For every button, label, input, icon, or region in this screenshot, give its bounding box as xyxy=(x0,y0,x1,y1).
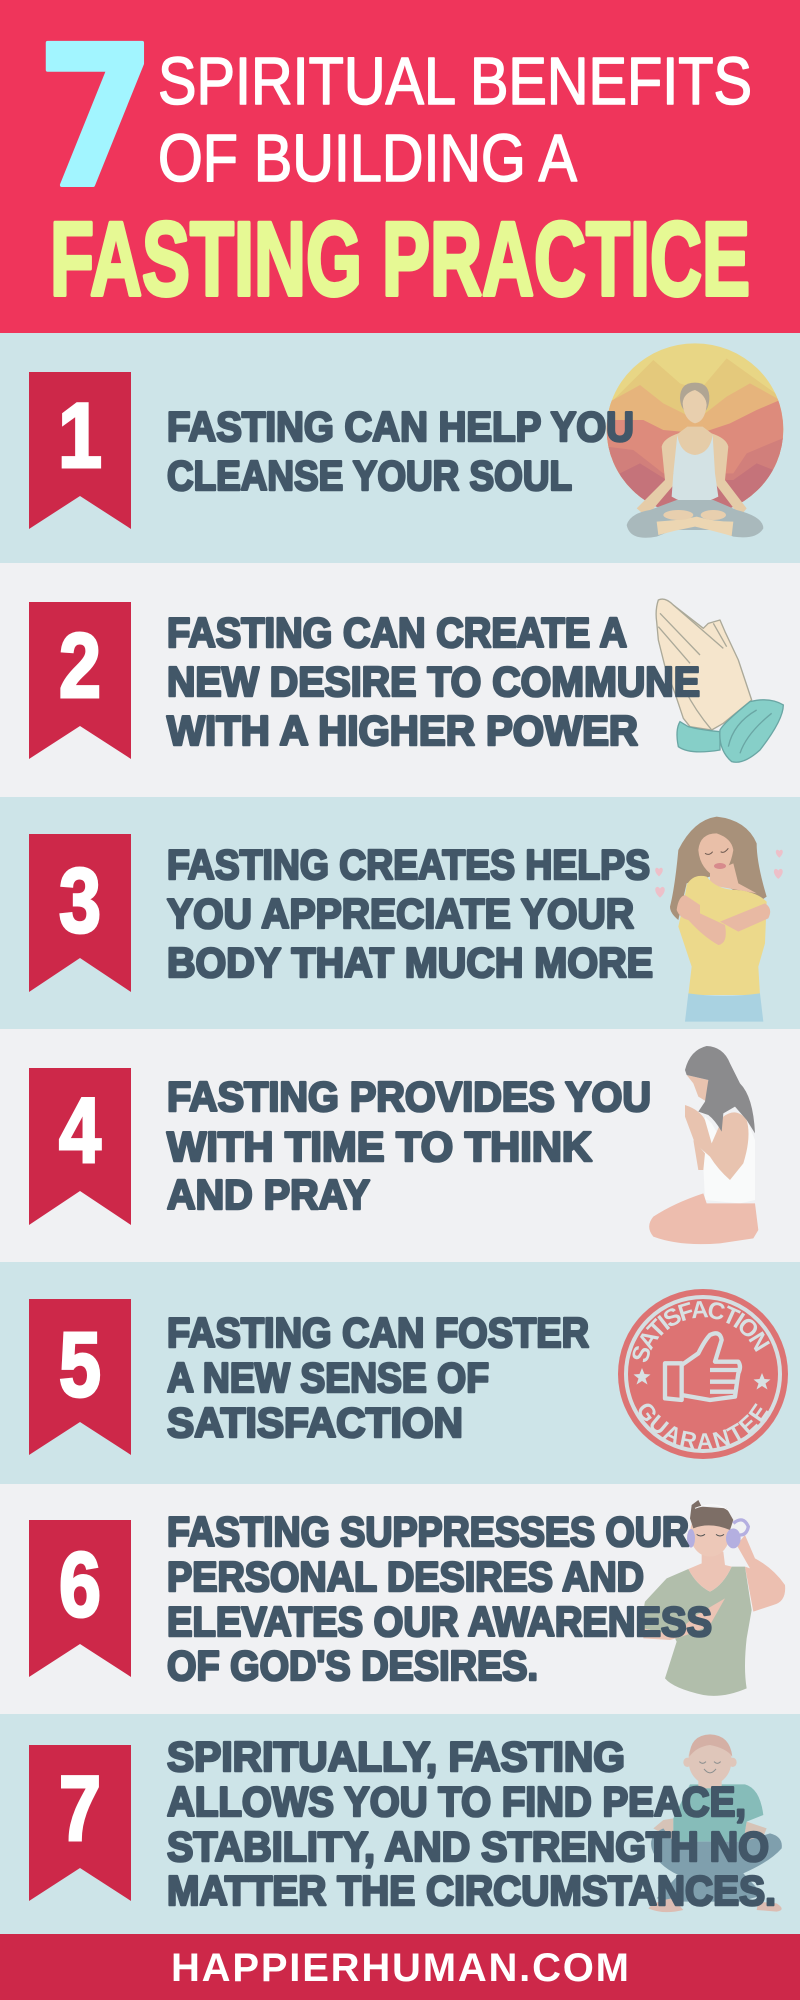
illustration: satisfaction guarantee stamp: SATISFACTION xyxy=(632,1301,770,1362)
panel 2: commune with a higher power xyxy=(0,563,800,797)
illustration: kneeling woman praying xyxy=(649,1046,758,1244)
benefit text 7 xyxy=(167,1733,776,1914)
title line 2: OF BUILDING A xyxy=(158,121,577,196)
benefit text 5: A NEW SENSE OF xyxy=(167,1354,489,1401)
number 2: 2 xyxy=(59,615,101,717)
benefit text 1 xyxy=(167,403,634,499)
illustration: man meditating cross-legged xyxy=(648,1734,782,1912)
number 5: 5 xyxy=(59,1314,101,1416)
illustration: woman hugging herself xyxy=(655,817,783,1022)
benefit text 2: FASTING CAN CREATE A xyxy=(167,609,627,656)
ribbon 1 xyxy=(29,372,131,529)
benefit text 4: WITH TIME TO THINK xyxy=(167,1123,592,1170)
benefit text 7: STABILITY, AND STRENGTH NO xyxy=(167,1823,769,1870)
number 6: 6 xyxy=(59,1534,101,1636)
number 1: 1 xyxy=(58,385,102,487)
panel 7: peace, stability, strength xyxy=(0,1714,800,1934)
benefit text 5: SATISFACTION xyxy=(167,1399,463,1446)
ribbon 5 xyxy=(29,1299,131,1455)
benefit text 2: NEW DESIRE TO COMMUNE xyxy=(167,658,700,705)
benefit text 6 xyxy=(167,1508,712,1689)
panel 3: appreciate your body xyxy=(0,797,800,1029)
benefit text 3 xyxy=(167,841,653,986)
panel 5: new sense of satisfaction xyxy=(0,1262,800,1484)
benefit text 4 xyxy=(167,1073,651,1218)
benefit text 7: SPIRITUALLY, FASTING xyxy=(167,1733,625,1780)
illustration: satisfaction guarantee stamp: GUARANTEE xyxy=(638,1403,768,1449)
benefit text 7: ALLOWS YOU TO FIND PEACE, xyxy=(167,1778,746,1825)
illustration: satisfaction guarantee stamp xyxy=(618,1289,788,1459)
illustration: man with hand on heart xyxy=(643,1500,785,1696)
panel 1: cleanse your soul xyxy=(0,333,800,563)
panel 6: elevates awareness xyxy=(0,1484,800,1714)
benefit text 6: PERSONAL DESIRES AND xyxy=(167,1553,644,1600)
number 4: 4 xyxy=(59,1080,101,1182)
benefit text 1: FASTING CAN HELP YOU xyxy=(167,403,634,450)
ribbon 4 xyxy=(29,1068,131,1225)
benefit text 6: OF GOD'S DESIRES. xyxy=(167,1642,538,1689)
header xyxy=(0,0,800,333)
ribbon 7 xyxy=(29,1745,131,1901)
number 3: 3 xyxy=(59,850,101,952)
number 7: 7 xyxy=(59,1758,101,1860)
illustration: meditating woman xyxy=(606,343,784,538)
ribbon 3 xyxy=(29,834,131,992)
panel 4: time to think and pray xyxy=(0,1029,800,1262)
benefit text 3: FASTING CREATES HELPS xyxy=(167,841,650,888)
benefit text 5: FASTING CAN FOSTER xyxy=(167,1309,589,1356)
ribbon 2 xyxy=(29,602,131,759)
benefit text 2: WITH A HIGHER POWER xyxy=(167,707,638,754)
ribbon 6 xyxy=(29,1520,131,1677)
benefit text 6: FASTING SUPPRESSES OUR xyxy=(167,1508,689,1555)
big number 7: 7 xyxy=(36,4,156,231)
benefit text 4: AND PRAY xyxy=(167,1171,370,1218)
benefit text 1: CLEANSE YOUR SOUL xyxy=(167,452,572,499)
benefit text 2 xyxy=(167,609,700,754)
website: HAPPIERHUMAN.COM xyxy=(171,1946,629,1990)
illustration: praying hands xyxy=(656,599,783,762)
benefit text 5 xyxy=(167,1309,589,1446)
benefit text 4: FASTING PROVIDES YOU xyxy=(167,1073,651,1120)
benefit text 3: YOU APPRECIATE YOUR xyxy=(167,890,634,937)
footer xyxy=(0,1934,800,2000)
benefit text 6: ELEVATES OUR AWARENESS xyxy=(167,1598,712,1645)
benefit text 3: BODY THAT MUCH MORE xyxy=(167,939,653,986)
